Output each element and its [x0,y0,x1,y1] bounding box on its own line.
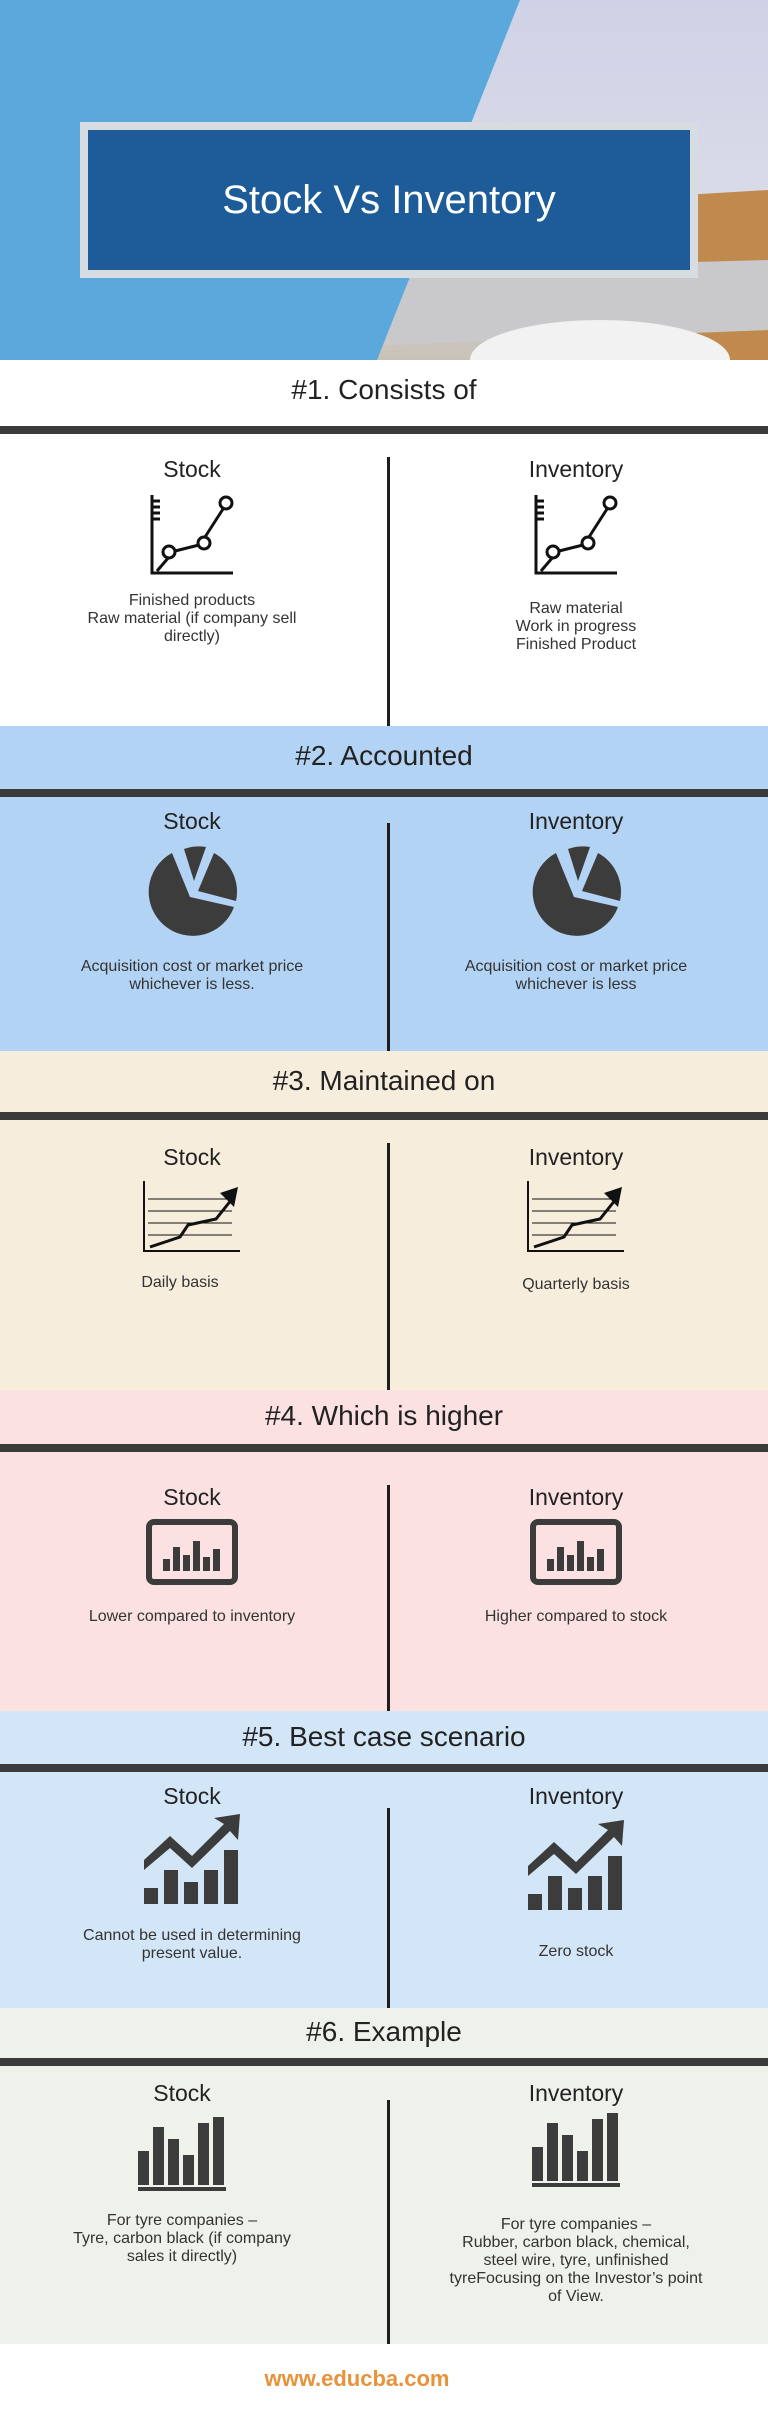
column: stock 2: Acquisition cost or market price [81,958,303,975]
icon: pie chart [148,846,237,936]
column: inventory 6: steel wire, tyre, unfinished [484,2252,668,2269]
column: inventory 1: Inventory [529,456,623,482]
icon: bar chart [532,2113,620,2187]
column: inventory 1: Raw material [529,600,623,617]
icon: line chart [534,495,618,574]
section 4 [0,1390,768,1711]
column: stock 4: Lower compared to inventory [89,1608,295,1625]
column: stock 5: present value. [142,1945,242,1962]
heading 6: #6. Example [306,2016,462,2047]
section 1 [0,360,768,726]
section 3 [0,1051,768,1390]
column: stock 5: Cannot be used in determining [83,1927,301,1944]
column: stock 4: Stock [163,1484,221,1510]
column: stock 3: Stock [163,1144,221,1170]
icon: pie chart [532,846,621,936]
column: stock 1: directly) [164,628,220,645]
section 5 [0,1711,768,2008]
heading 2: #2. Accounted [295,740,473,771]
icon: monitor bar chart [146,1519,238,1585]
column: inventory 4: Inventory [529,1484,623,1510]
column: stock 4 [89,1484,296,1625]
heading 3: #3. Maintained on [273,1065,495,1096]
column: inventory 1 [516,456,636,653]
icon: monitor bar chart [530,1519,622,1585]
footer: website: www.educba.com [264,2366,450,2391]
icon: trend chart [143,1181,240,1252]
heading 1: #1. Consists of [291,374,477,405]
column: inventory 5: Inventory [529,1783,623,1809]
icon: bars with arrow [528,1820,624,1910]
heading 5: #5. Best case scenario [242,1721,526,1752]
column: stock 3: Daily basis [141,1274,219,1291]
column: stock 6: sales it directly) [127,2248,237,2265]
column: inventory 2: whichever is less [516,976,636,993]
title box: Stock Vs Inventory [222,178,556,222]
column: inventory 6: Inventory [529,2080,623,2106]
column: stock 6: Tyre, carbon black (if company [73,2230,291,2247]
column: inventory 4 [485,1484,668,1625]
column: inventory 2: Inventory [529,808,623,834]
title box [80,122,698,278]
icon: bar chart [138,2117,226,2191]
column: stock 1: Stock [163,456,221,482]
icon: line chart [150,495,234,574]
section 2 [0,726,768,1051]
column: inventory 5: Zero stock [539,1943,613,1960]
column: inventory 3 [522,1144,630,1293]
icon: trend chart [527,1181,624,1252]
column: inventory 1: Finished Product [516,636,636,653]
column: stock 2: Stock [163,808,221,834]
column: stock 3 [141,1144,240,1291]
column: inventory 6: of View. [548,2288,604,2305]
column: stock 2 [81,808,303,993]
column: stock 6: For tyre companies – [107,2212,257,2229]
column: stock 6 [73,2080,291,2265]
column: inventory 1: Work in progress [516,618,636,635]
column: inventory 2: Acquisition cost or market price [465,958,687,975]
column: inventory 6: tyreFocusing on the Investor’s point [450,2270,702,2287]
column: inventory 6: For tyre companies – [501,2216,651,2233]
column: inventory 6 [450,2080,702,2305]
column: inventory 6: Rubber, carbon black, chemical, [462,2234,690,2251]
column: stock 5 [83,1783,301,1962]
column: stock 1: Raw material (if company sell [88,610,296,627]
column: inventory 3: Inventory [529,1144,623,1170]
heading 4: #4. Which is higher [265,1400,503,1431]
column: stock 1: Finished products [129,592,255,609]
section 6 [0,2008,768,2344]
column: stock 6: Stock [153,2080,211,2106]
column: inventory 4: Higher compared to stock [485,1608,667,1625]
header [0,0,768,360]
column: stock 1 [88,456,296,645]
column: inventory 3: Quarterly basis [522,1276,630,1293]
column: stock 5: Stock [163,1783,221,1809]
column: inventory 2 [465,808,687,993]
column: inventory 5 [528,1783,624,1960]
column: stock 2: whichever is less. [129,976,255,993]
icon: bars with arrow [144,1814,240,1904]
